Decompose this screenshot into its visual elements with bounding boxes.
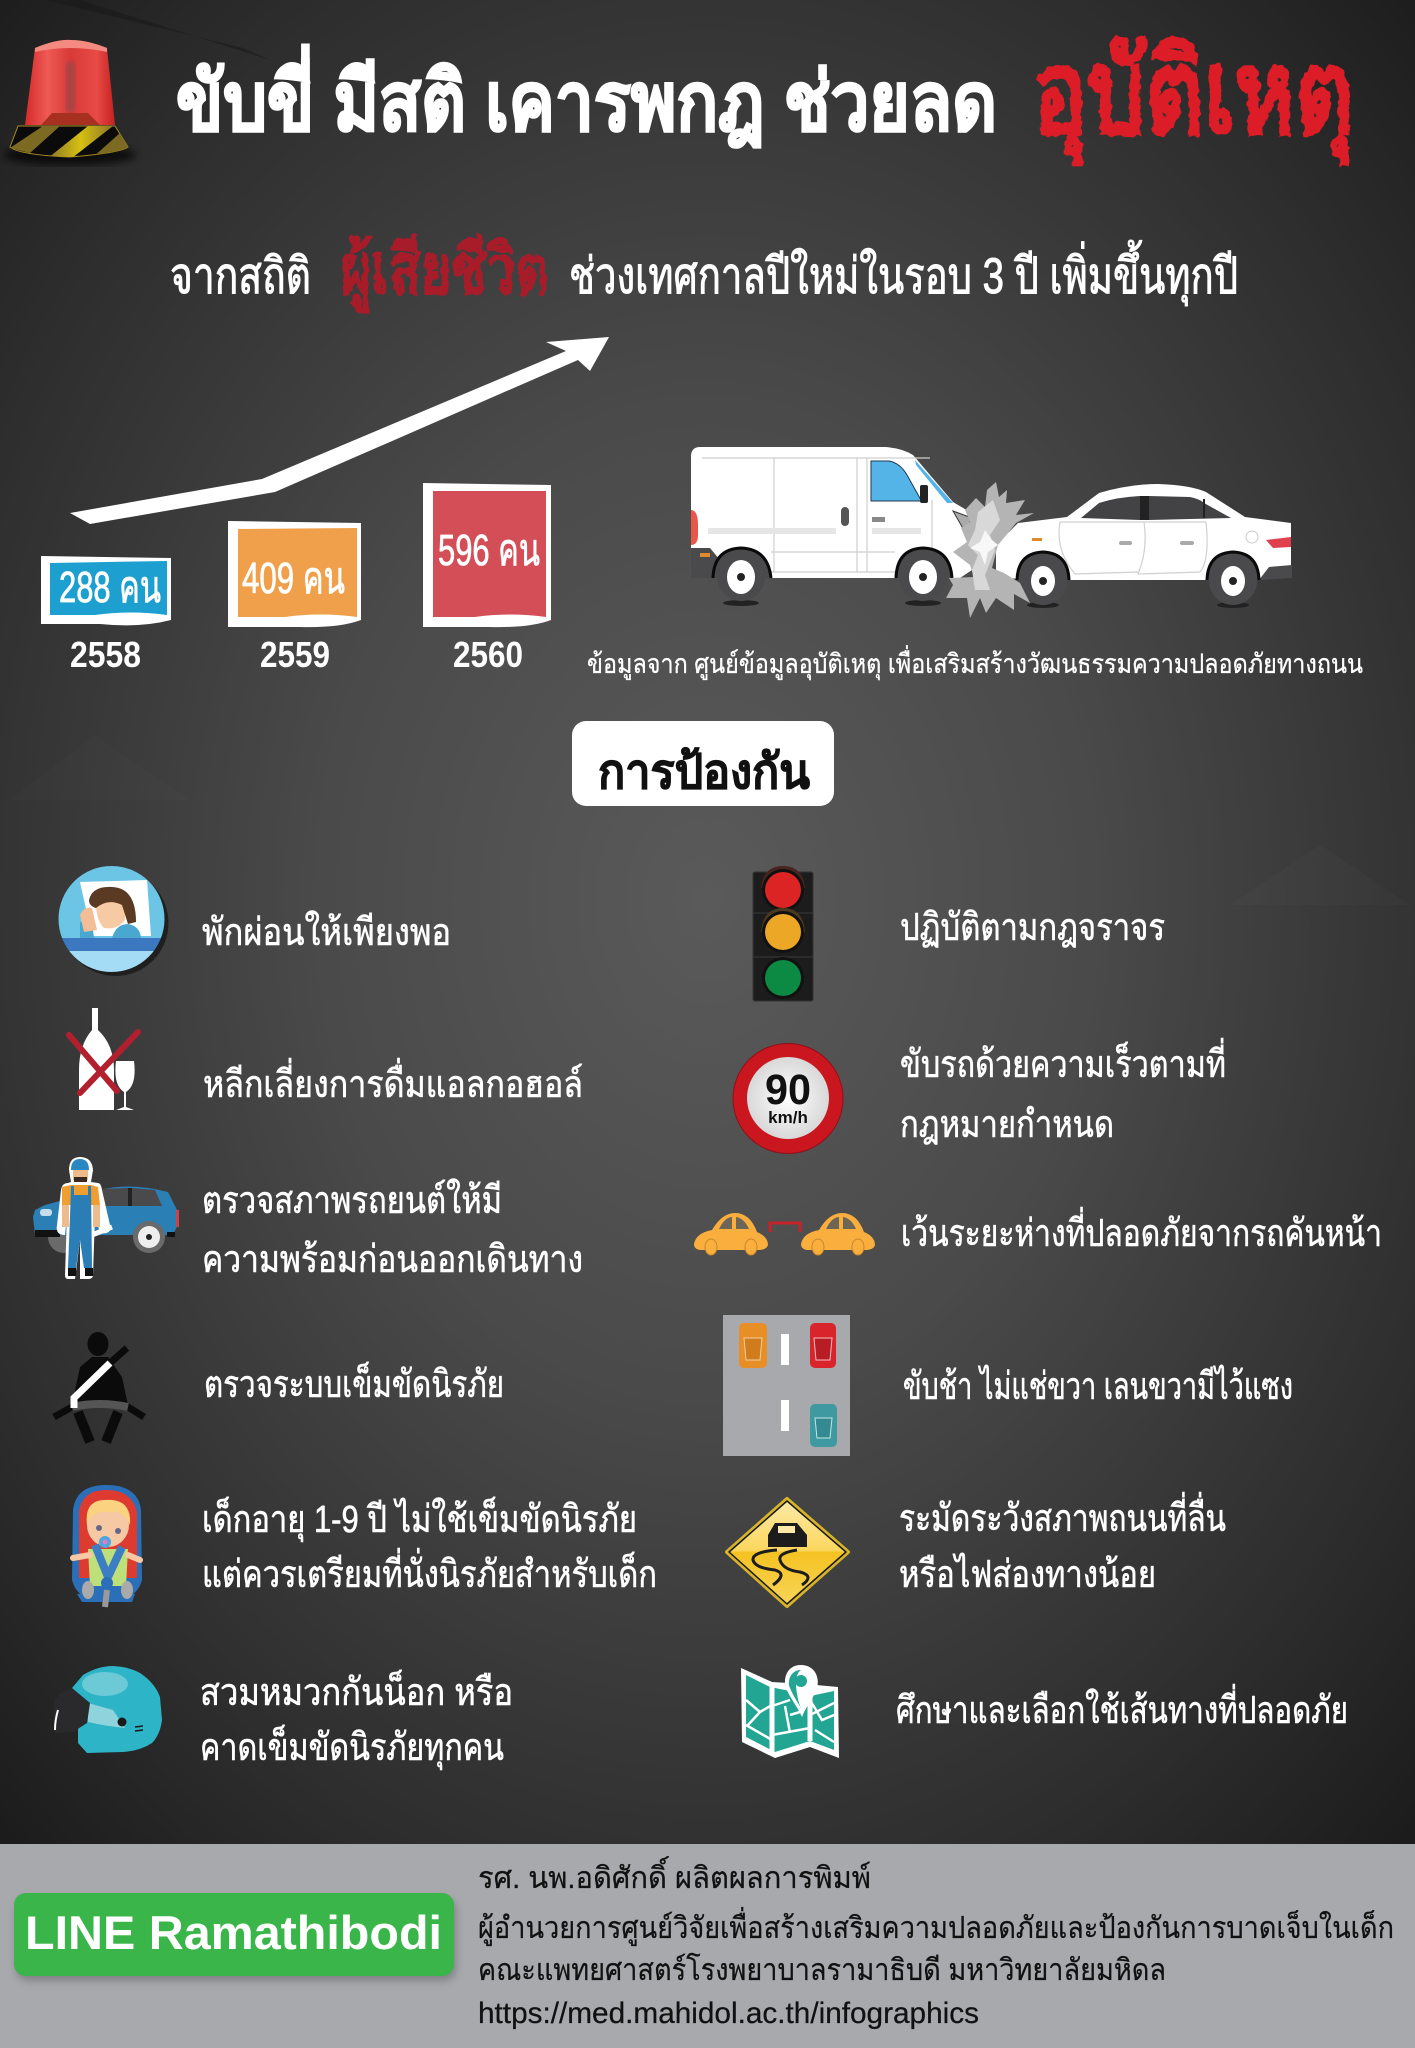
- author credits: รศ. นพ.อดิศักดิ์ ผลิตผลการพิมพ์: [478, 1856, 871, 1895]
- LINE Ramathibodi badge: LINE Ramathibodi: [25, 1906, 442, 1959]
- prevention item: seat belt: [54, 1332, 504, 1442]
- prevention item: child seat: เด็กอายุ 1-9 ปี ไม่ใช้เข็มขัดนิรภัย: [202, 1496, 637, 1542]
- illustration: van and car collision: [691, 447, 1292, 618]
- prevention item: speed limit: กฎหมายกำหนด: [900, 1104, 1114, 1146]
- van: [691, 447, 975, 606]
- icon: baby in car seat: [72, 1485, 142, 1607]
- subtitle: ผู้เสียชีวิต: [341, 232, 549, 313]
- prevention item: helmet: คาดเข็มขัดนิรภัยทุกคน: [200, 1724, 504, 1770]
- LINE Ramathibodi badge: [14, 1893, 456, 1981]
- prevention item: speed limit: ขับรถด้วยความเร็วตามที่: [900, 1038, 1226, 1086]
- icon: mechanic with car: [33, 1157, 179, 1279]
- icon: 90 km/h sign: km/h: [768, 1108, 808, 1127]
- bar 2559: [228, 521, 361, 675]
- prevention item: helmet: [54, 1666, 513, 1770]
- author credits: คณะแพทยศาสตร์โรงพยาบาลรามาธิบดี มหาวิทยาลัยมหิดล: [478, 1952, 1166, 1987]
- prevention item: seat belt: ตรวจระบบเข็มขัดนิรภัย: [204, 1361, 504, 1406]
- bar chart: deaths per year: [41, 483, 551, 675]
- bar 2560: [423, 483, 551, 675]
- subtitle: จากสถิติ: [170, 248, 311, 304]
- prevention item: avoid alcohol: [69, 1008, 583, 1110]
- bar 2559: 409 คน: [242, 554, 345, 603]
- prevention item: choose a safe route: [741, 1665, 1348, 1758]
- heading: prevention: การป้องกัน: [598, 746, 810, 799]
- icon: two cars with gap: [694, 1213, 875, 1255]
- prevention item: helmet: สวมหมวกกันน็อก หรือ: [200, 1669, 513, 1714]
- prevention item: slippery roads: หรือไฟส่องทางน้อย: [899, 1553, 1156, 1596]
- bar 2558: [41, 556, 171, 675]
- prevention item: child seat: [72, 1485, 657, 1607]
- prevention item: speed limit: [733, 1038, 1226, 1154]
- title: ขับขี่ มีสติ เคารพกฎ ช่วยลด: [176, 44, 997, 149]
- prevention item: check the car: ความพร้อมก่อนออกเดินทาง: [202, 1239, 583, 1281]
- prevention item: rest: [58, 866, 451, 976]
- prevention item: slippery roads: ระมัดระวังสภาพถนนที่ลื่น: [899, 1492, 1226, 1540]
- prevention item: avoid alcohol: หลีกเลี่ยงการดื่มแอลกอฮอล์: [203, 1058, 583, 1106]
- icon: crossed bottle and glass: [69, 1008, 138, 1110]
- prevention item: check the car: [33, 1157, 583, 1281]
- footer panel: [0, 1844, 1415, 2048]
- prevention item: obey traffic rules: ปฏิบัติตามกฎจราจร: [900, 907, 1165, 949]
- arrow: rising trend: [70, 337, 609, 524]
- explosion: [946, 482, 1034, 618]
- bar 2560: 2560: [453, 634, 523, 675]
- icon: seat belt person: [54, 1332, 144, 1442]
- car: [996, 484, 1292, 608]
- heading: prevention: [572, 721, 834, 806]
- prevention item: check the car: ตรวจสภาพรถยนต์ให้มี: [202, 1179, 502, 1222]
- prevention item: child seat: แต่ควรเตรียมที่นั่งนิรภัยสำหรับเด็ก: [202, 1548, 657, 1596]
- icon: slippery road sign: [727, 1499, 848, 1606]
- prevention item: rest: พักผ่อนให้เพียงพอ: [202, 911, 451, 954]
- icon: traffic light: [753, 866, 813, 1001]
- prevention item: lane discipline: [723, 1315, 1293, 1456]
- icon: red warning beacon: [4, 40, 136, 165]
- prevention item: keep distance: [694, 1207, 1382, 1255]
- icon: 90 km/h sign: 90: [765, 1066, 811, 1114]
- prevention item: obey traffic rules: [753, 866, 1165, 1001]
- author credits: https://med.mahidol.ac.th/infographics: [478, 1997, 979, 2030]
- icon: 90 km/h sign: [733, 1044, 843, 1154]
- author credits: [478, 1856, 1394, 2030]
- icon: sleeping person: [58, 866, 168, 976]
- bar 2560: 596 คน: [438, 526, 540, 575]
- bar 2558: 2558: [70, 634, 141, 675]
- subtitle: [170, 232, 1238, 313]
- icon: map with pin: [741, 1665, 839, 1758]
- bar 2559: 2559: [260, 634, 330, 675]
- bar 2558: 288 คน: [59, 563, 161, 612]
- icon: road with cars: [723, 1315, 850, 1456]
- prevention item: slippery roads: [727, 1492, 1226, 1606]
- icon: helmet: [54, 1666, 162, 1753]
